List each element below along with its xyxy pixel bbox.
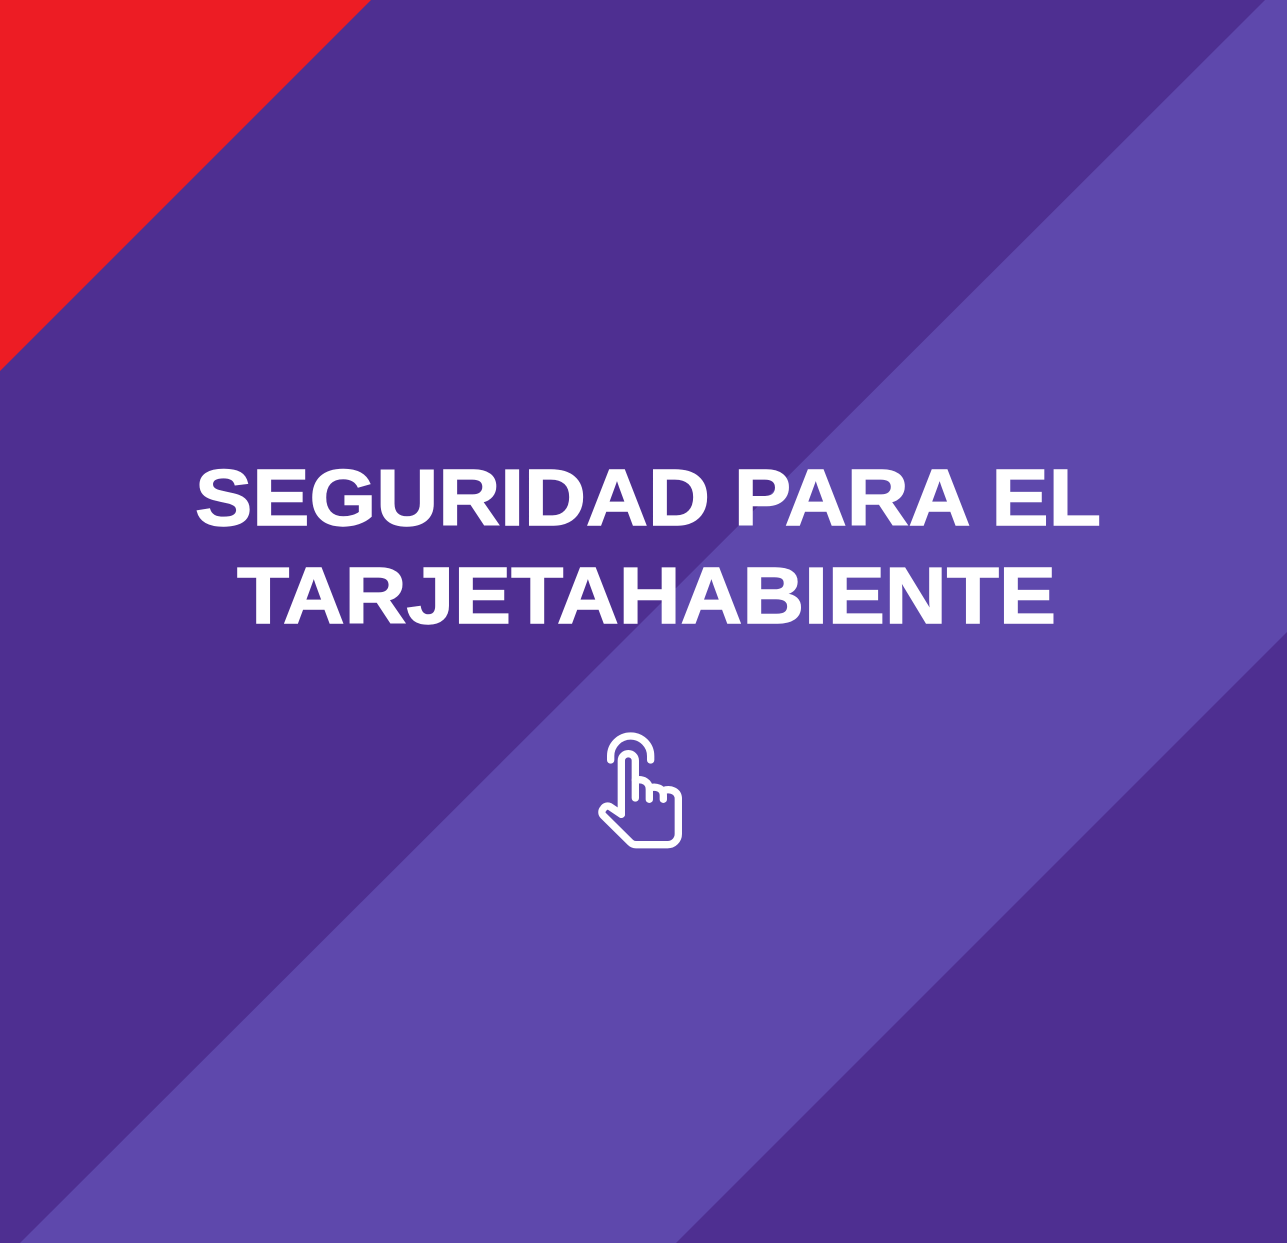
title: TARJETAHABIENTE xyxy=(237,551,1056,640)
title xyxy=(195,453,1101,640)
title: SEGURIDAD PARA EL xyxy=(195,453,1101,542)
corner triangle: red xyxy=(0,0,371,371)
icon: tapping hand xyxy=(602,736,678,845)
